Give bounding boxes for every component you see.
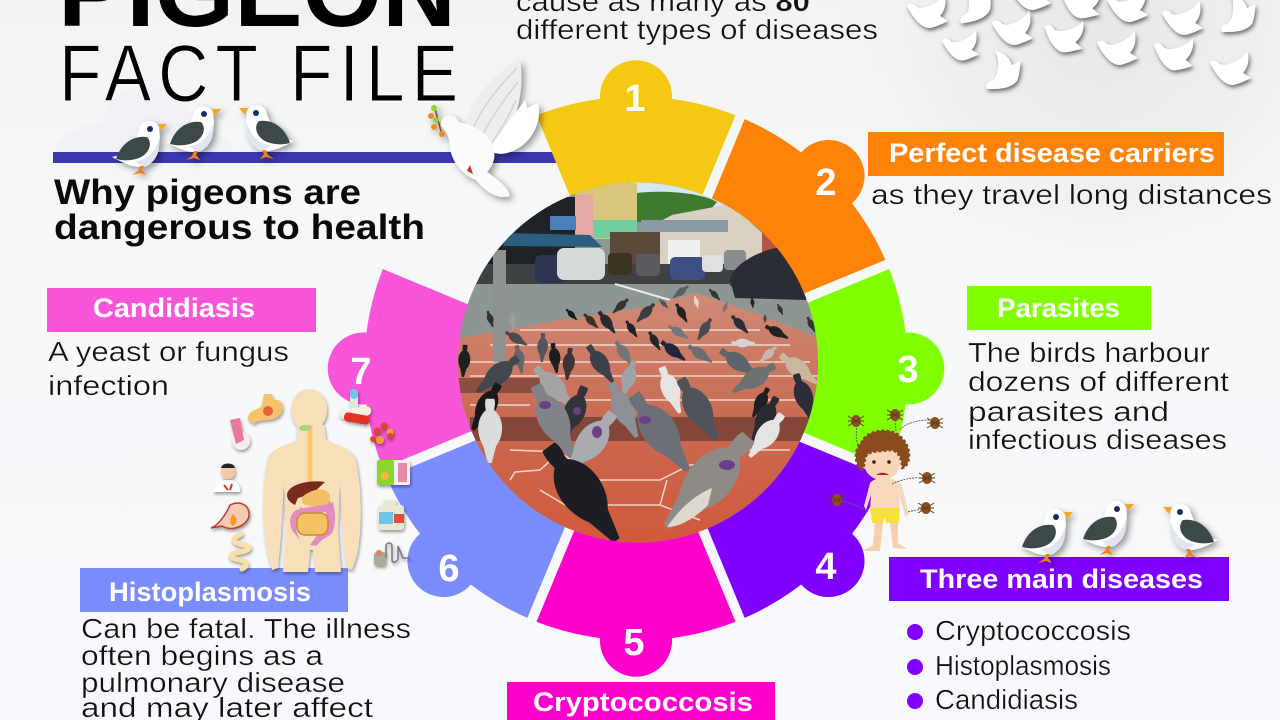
icon: boy covered in parasites — [829, 409, 943, 551]
segment 5: 5 — [623, 622, 645, 664]
label: parasites: infectious diseases — [968, 424, 1227, 455]
label: three main diseases: Three main diseases — [920, 564, 1203, 594]
parasites — [829, 409, 943, 514]
label: candidiasis: A yeast or fungus — [48, 336, 289, 367]
label: candidiasis: Candidiasis — [93, 293, 255, 323]
label: histoplasmosis: often begins as a — [81, 640, 323, 671]
segment 2: 2 — [815, 162, 837, 204]
wheel — [328, 60, 944, 677]
subtitle: Why pigeons are — [54, 173, 361, 212]
segment 4 — [665, 397, 924, 657]
photo: pigeons in a town square — [450, 182, 825, 553]
segment 1 — [536, 60, 736, 228]
segment 7 — [328, 269, 496, 468]
label: parasites: parasites and — [968, 396, 1169, 427]
label: histoplasmosis: pulmonary disease — [81, 667, 345, 698]
flock of pigeons — [457, 283, 822, 553]
label: cryptococcosis — [507, 682, 775, 720]
cloud — [57, 86, 232, 152]
icon: blister pack — [377, 460, 410, 485]
icon: intestine — [231, 534, 249, 569]
flock of paper doves — [907, 0, 1261, 100]
list: disease names: Histoplasmosis — [935, 650, 1111, 681]
list: disease names — [907, 615, 1131, 715]
label: candidiasis: infection — [48, 370, 169, 401]
segment 4: 4 — [815, 546, 837, 588]
segment 1: 1 — [624, 78, 646, 120]
subtitle — [54, 173, 425, 247]
segment 5 — [536, 509, 736, 677]
list: disease names: Candidiasis — [935, 684, 1078, 715]
subtitle: dangerous to health — [54, 208, 425, 247]
segment 3: 3 — [897, 349, 919, 391]
intro text: disease count: different types of diseases — [516, 14, 878, 45]
title: FACT FILE — [59, 29, 458, 119]
label: perfect disease carriers: Perfect disease carriers — [889, 138, 1215, 168]
icon: human body with digestive organs — [263, 389, 361, 572]
label: parasites: Parasites — [997, 293, 1120, 323]
label: histoplasmosis: Can be fatal. The illness — [81, 613, 411, 644]
icon: person with stomach pain — [213, 464, 240, 492]
label: histoplasmosis — [80, 568, 411, 720]
segment 2 — [665, 80, 924, 340]
icon: stomach with heartburn flame — [211, 503, 249, 528]
label: histoplasmosis: Histoplasmosis — [109, 577, 311, 607]
icon: throat — [230, 418, 250, 450]
label: perfect disease carriers — [868, 132, 1272, 210]
segment 7: 7 — [350, 351, 372, 393]
intro text: disease count — [516, 0, 878, 45]
paved plaza — [450, 293, 825, 550]
parked cars — [535, 246, 806, 300]
segment 6 — [348, 397, 607, 657]
icon: medicine bottles — [378, 500, 404, 530]
segment 3 — [776, 269, 944, 468]
icon: stomach with ulcer — [248, 394, 283, 424]
boy figure — [856, 431, 909, 551]
divider bar — [53, 152, 558, 163]
list: disease names: Cryptococcosis — [935, 615, 1131, 646]
birds on bar — [112, 105, 294, 175]
segment 6: 6 — [438, 548, 460, 590]
pole — [493, 250, 506, 362]
icon: pills — [339, 389, 372, 425]
icon: endoscope — [374, 543, 410, 566]
icon: white dove with olive branch — [428, 60, 539, 197]
label: parasites: dozens of different — [968, 366, 1229, 397]
label: three main diseases — [889, 557, 1229, 715]
label: cryptococcosis: Cryptococcosis — [533, 687, 753, 717]
label: perfect disease carriers: as they travel long distances — [871, 179, 1272, 210]
icon: red beads — [370, 422, 394, 444]
label: candidiasis — [47, 288, 316, 401]
birds above label — [1018, 501, 1218, 563]
label: parasites — [967, 286, 1229, 455]
label: parasites: The birds harbour — [968, 337, 1210, 368]
